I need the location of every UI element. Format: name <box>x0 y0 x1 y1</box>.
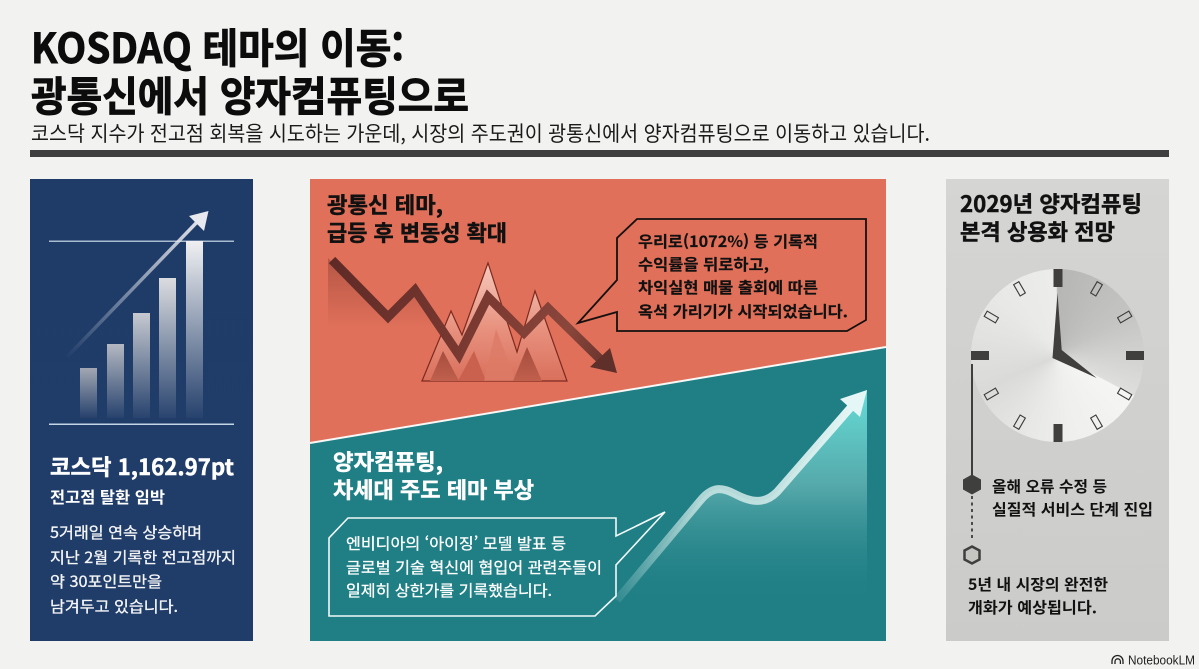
KOSDAQ body text: 남겨두고 있습니다. <box>50 595 178 617</box>
panel: KOSDAQ index <box>30 179 253 641</box>
timeline text: this year: 실질적 서비스 단계 진입 <box>992 498 1153 520</box>
callout: profit taking <box>578 219 866 331</box>
callout: profit taking: 우리로(1072%) 등 기록적 <box>638 230 818 252</box>
heading: quantum computing: 차세대 주도 테마 부상 <box>333 473 534 505</box>
panel: quantum computing theme <box>310 347 886 641</box>
callout: NVIDIA Ising: 일제히 상한가를 기록했습니다. <box>346 579 552 601</box>
timeline text: within five years: 개화가 예상됩니다. <box>968 596 1097 618</box>
header rule <box>30 150 1169 157</box>
title: 광통신에서 양자컴퓨팅으로 <box>31 63 469 123</box>
callout: NVIDIA Ising: 글로벌 기술 혁신에 협입어 관련주들이 <box>346 556 602 578</box>
timeline text: this year: 올해 오류 수정 등 <box>992 475 1107 497</box>
timeline text: this year <box>992 475 1153 520</box>
callout: profit taking: 옥석 가리기가 시작되었습니다. <box>638 300 848 322</box>
heading: optical communications: 광통신 테마, <box>327 188 443 220</box>
KOSDAQ body text: 약 30포인트만을 <box>50 570 162 592</box>
KOSDAQ figure: 코스닥 1,162.97pt <box>50 450 234 482</box>
heading: optical communications: 급등 후 변동성 확대 <box>327 216 507 248</box>
heading: quantum computing <box>333 445 534 505</box>
title <box>31 15 469 123</box>
KOSDAQ body text <box>50 521 236 617</box>
timeline text: within five years: 5년 내 시장의 완전한 <box>968 573 1108 595</box>
title: KOSDAQ 테마의 이동: <box>31 15 404 75</box>
heading: 2029 commercialization <box>960 187 1142 247</box>
KOSDAQ body text: 지난 2월 기록한 전고점까지 <box>50 546 236 568</box>
heading: 2029 commercialization: 2029년 양자컴퓨팅 <box>960 187 1142 219</box>
subtitle: 코스닥 지수가 전고점 회복을 시도하는 가운데, 시장의 주도권이 광통신에서 양자컴퓨팅으로 이동하고 있습니다. <box>31 118 930 148</box>
heading: quantum computing: 양자컴퓨팅, <box>333 445 443 477</box>
icon: clock <box>971 269 1145 443</box>
KOSDAQ body text: 5거래일 연속 상승하며 <box>50 521 202 543</box>
watermark: NotebookLM: NotebookLM <box>1128 654 1195 668</box>
timeline text: within five years <box>968 573 1108 618</box>
chart: rising quantum curve <box>617 390 867 605</box>
callout: NVIDIA Ising <box>329 512 665 616</box>
callout: profit taking: 차익실현 매물 출회에 따른 <box>638 276 818 298</box>
KOSDAQ subheading: 전고점 탈환 임박 <box>50 484 165 508</box>
timeline connector <box>963 364 981 564</box>
chart: rising bars with arrow <box>49 211 234 425</box>
callout: profit taking: 수익률을 뒤로하고, <box>638 253 769 275</box>
panel: optical communications theme <box>310 179 886 443</box>
panel: 2029 outlook <box>946 179 1169 641</box>
heading: optical communications <box>327 188 507 248</box>
chart: falling line over peaks <box>328 258 617 381</box>
heading: 2029 commercialization: 본격 상용화 전망 <box>960 215 1115 247</box>
callout: NVIDIA Ising: 엔비디아의 ‘아이징’ 모델 발표 등 <box>346 532 566 554</box>
